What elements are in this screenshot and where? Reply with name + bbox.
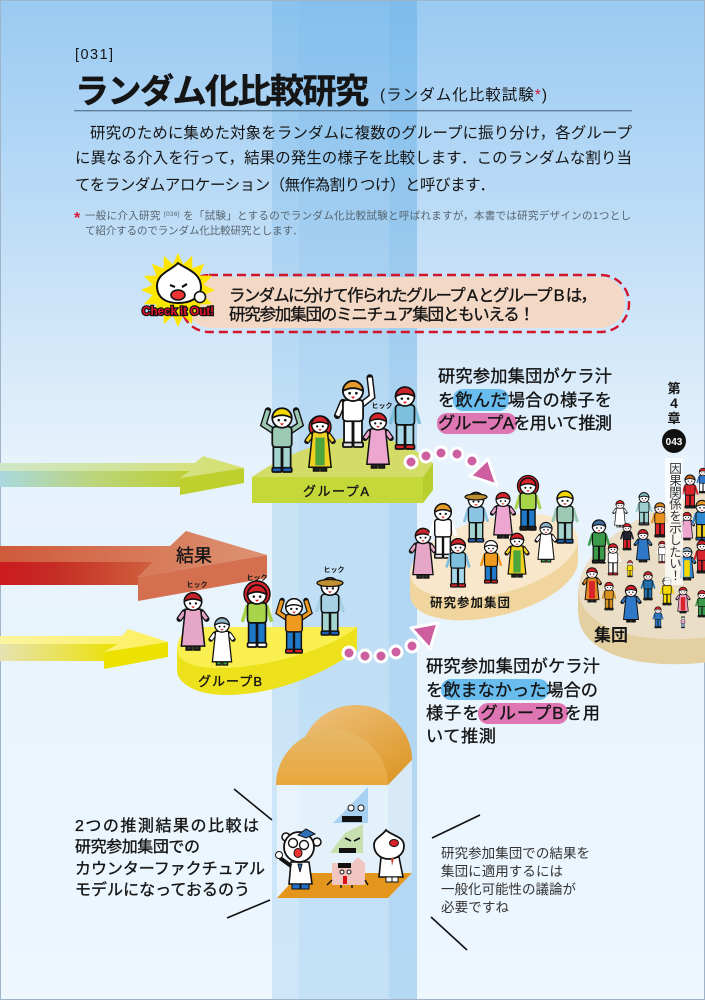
footnote: * xyxy=(74,210,81,227)
icon: check it out mascot xyxy=(141,253,215,327)
disc: population xyxy=(562,453,705,692)
hiccup labels: ヒック xyxy=(324,565,344,574)
figure: man with afro xyxy=(242,581,272,647)
text: counterfactual comment: 2つの推測結果の比較は xyxy=(75,817,259,835)
arrow: green to group A xyxy=(0,456,244,495)
figure: woman in pink xyxy=(492,493,514,538)
figure: woman with apron xyxy=(507,533,527,577)
highlight: drank xyxy=(453,389,509,411)
text: counterfactual comment: 研究参加集団での xyxy=(75,838,200,856)
figure: woman with apron xyxy=(307,416,333,471)
figure: woman in pink xyxy=(365,413,391,468)
page number xyxy=(662,429,686,453)
callout border xyxy=(181,275,629,332)
figure: man in suit xyxy=(447,539,469,587)
text: generalizability comment: 集団に適用するには xyxy=(441,864,563,879)
arrow: yellow to group B xyxy=(0,629,168,669)
arrow: dotted group B to participants xyxy=(343,623,438,662)
hiccup labels xyxy=(186,565,344,589)
title rule xyxy=(74,110,632,111)
callout lines: left xyxy=(227,789,272,918)
figure: man in suit xyxy=(390,387,420,449)
figure: woman in kimono xyxy=(411,528,435,578)
arrow label: 結果 xyxy=(176,546,212,566)
callout xyxy=(181,275,629,332)
text lines: 様子をグループBを用 xyxy=(426,703,600,723)
side tab: chapter: 043 xyxy=(666,437,683,448)
text lines: 研究参加集団がケラ汁 xyxy=(438,366,612,386)
people: group B xyxy=(179,565,344,665)
character: blue triangle block xyxy=(333,787,368,823)
text lines: グループAを用いて推測 xyxy=(438,413,612,433)
text: did not drink case xyxy=(426,656,600,746)
icon: check it out mascot: Check It Out! xyxy=(142,304,214,318)
text: counterfactual comment: カウンターファクチュアル xyxy=(75,860,265,878)
side tab label xyxy=(665,458,683,585)
text lines: いて推測 xyxy=(426,726,496,746)
arrow: result xyxy=(0,531,267,601)
character: pink block xyxy=(327,857,368,888)
figure: worker xyxy=(264,408,300,472)
people: group A xyxy=(264,378,420,472)
figure: man in white suit xyxy=(337,378,372,447)
disc: research participants xyxy=(401,498,587,636)
callout lines: right xyxy=(431,815,480,950)
platform: group B xyxy=(177,627,357,695)
platform: group A xyxy=(252,435,433,503)
hiccup label: ヒック xyxy=(372,401,392,410)
dome front xyxy=(276,730,388,785)
highlight: did not drink xyxy=(441,679,549,700)
footnote: [036] xyxy=(164,211,180,218)
people: research participants xyxy=(411,476,577,587)
callout text xyxy=(229,286,597,324)
figure: woman in kimono xyxy=(179,593,207,650)
footnote: て紹介するのでランダム化比較研究とします． xyxy=(85,224,303,237)
hiccup labels: ヒック xyxy=(246,573,268,582)
intro paragraph: てをランダムアロケーション（無作為割りつけ）と呼びます． xyxy=(75,176,495,194)
section number: [031] xyxy=(75,47,113,63)
callout pill xyxy=(186,277,625,328)
callout text: ランダムに分けて作られたグループ A とグループ B は， xyxy=(229,286,597,305)
box walls xyxy=(277,785,388,898)
text: generalizability comment: 研究参加集団での結果を xyxy=(441,845,590,861)
figure: worker xyxy=(553,491,577,543)
side tab: chapter: 因果関係を示したい！ xyxy=(667,462,681,581)
character: green stair block xyxy=(330,824,363,853)
subtitle: (ランダム化比較試験*) xyxy=(380,86,547,104)
dome back xyxy=(276,705,412,785)
character: white companion xyxy=(374,830,404,882)
title: ランダム化比較研究 xyxy=(75,72,369,111)
platform label: グループA xyxy=(303,484,369,499)
floor xyxy=(277,873,412,898)
intro paragraph: 研究のために集めた対象をランダムに複数のグループに振り分け，各グループ xyxy=(90,124,632,142)
figure: man with afro xyxy=(516,476,540,530)
character: pig doctor xyxy=(276,829,321,889)
side tab: chapter: 第 xyxy=(667,381,681,396)
figure: old woman xyxy=(537,522,555,562)
text: generalizability comment: 必要ですね xyxy=(441,900,510,915)
side tab: chapter xyxy=(662,381,686,585)
hiccup labels: ヒック xyxy=(186,580,208,589)
figure: farmer xyxy=(464,492,488,542)
footnote: を「試験」とするのでランダム化比較試験と呼ばれますが，本書では研究デザインの1つとし xyxy=(180,209,631,222)
arrow: dotted group A to participants xyxy=(405,447,497,485)
dome box illustration xyxy=(276,705,412,898)
text: generalizability comment xyxy=(441,845,590,915)
intro paragraph: に異なる介入を行って，結果の発生の様子を比較します．このランダムな割り当 xyxy=(75,149,632,167)
text lines xyxy=(426,656,600,746)
figure: man in white suit xyxy=(430,504,456,558)
figure: bald man in orange xyxy=(278,599,310,653)
text: drank case xyxy=(437,366,612,434)
text lines xyxy=(438,366,612,433)
people: population crowd xyxy=(584,468,705,628)
text lines: を飲まなかった場合の xyxy=(426,680,598,700)
figure: bald man in orange xyxy=(481,541,501,583)
text lines: を飲んだ場合の様子を xyxy=(438,390,612,410)
text: generalizability comment: 一般化可能性の議論が xyxy=(441,881,576,897)
text lines: 研究参加集団がケラ汁 xyxy=(426,656,600,676)
side tab: chapter: 章 xyxy=(667,411,681,426)
highlight: group B xyxy=(478,703,568,724)
disc label: 研究参加集団 xyxy=(430,595,510,610)
disc label: 集団 xyxy=(594,626,628,645)
side tab: chapter: 4 xyxy=(670,395,678,411)
text: counterfactual comment xyxy=(75,817,265,899)
footnote: 一般に介入研究 xyxy=(85,210,160,222)
platform label: グループB xyxy=(198,674,262,689)
figure: old woman xyxy=(211,618,233,665)
callout text: 研究参加集団のミニチュア集団ともいえる！ xyxy=(229,305,535,324)
intro paragraph xyxy=(75,124,632,194)
figure: farmer xyxy=(316,578,344,635)
footnote xyxy=(74,209,631,237)
highlight: group A xyxy=(437,413,517,434)
text: counterfactual comment: モデルになっておるのう xyxy=(75,880,250,899)
